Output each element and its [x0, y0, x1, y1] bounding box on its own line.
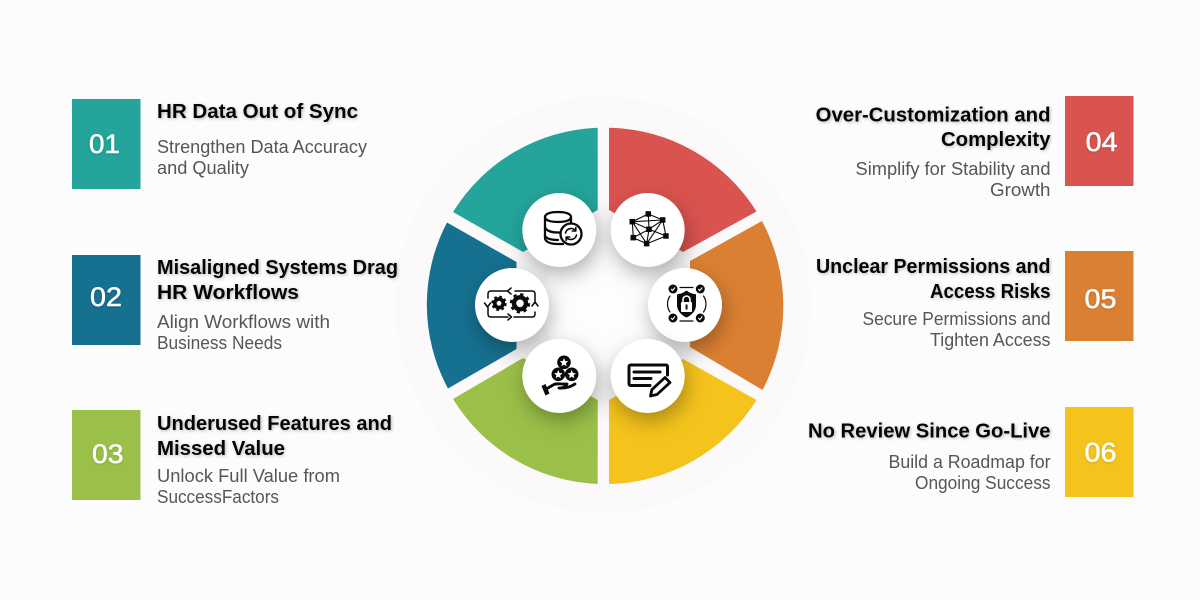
heading 03: Underused Features and: [157, 413, 392, 435]
heading 03: Missed Value: [157, 438, 285, 460]
heading 01: HR Data Out of Sync: [157, 101, 358, 123]
item 06: [808, 407, 1134, 497]
heading 02: Misaligned Systems Drag: [157, 257, 398, 279]
heading 05: Unclear Permissions and: [816, 256, 1050, 278]
heading 05: Access Risks: [930, 281, 1050, 303]
item 01: [72, 99, 367, 189]
item 02: [72, 255, 398, 353]
description 05: Tighten Access: [930, 330, 1050, 350]
number tile 03: [72, 410, 140, 500]
item 04: [816, 96, 1134, 200]
segment: red: [609, 128, 756, 252]
description 06: Build a Roadmap for: [888, 452, 1051, 472]
icon disc: security lock: [648, 268, 722, 342]
segment: teal: [453, 128, 598, 252]
description 04: Simplify for Stability and: [856, 159, 1050, 179]
icon disc: gears workflow: [475, 268, 549, 342]
description 03: [157, 466, 340, 507]
description 04: [856, 159, 1050, 200]
heading 02: HR Workflows: [157, 282, 299, 304]
icon: shield lock: [667, 284, 706, 322]
wheel diagram: [395, 97, 811, 513]
icon disc: network: [611, 193, 685, 267]
heading 04: [816, 105, 1051, 151]
description 04: Growth: [990, 180, 1050, 200]
icon: hand holding star coins: [542, 356, 578, 396]
description 05: Secure Permissions and: [862, 309, 1050, 329]
icon disc: hand with stars: [522, 339, 596, 413]
number tile 01: [72, 99, 140, 189]
number tile 05: 05: [1084, 284, 1116, 314]
number tile 06: [1065, 407, 1134, 497]
description 06: [888, 452, 1051, 493]
description 02: Align Workflows with: [157, 312, 330, 332]
centre hub: [541, 243, 665, 367]
segment: green: [453, 358, 598, 484]
heading 02: [157, 257, 398, 304]
description 06: Ongoing Success: [915, 473, 1050, 493]
description 02: Business Needs: [157, 333, 282, 353]
number tile 02: [72, 255, 140, 345]
item 05: [816, 251, 1134, 350]
description 01: and Quality: [157, 158, 249, 178]
segment: orange: [690, 221, 783, 390]
icon disc: database sync: [522, 193, 596, 267]
number tile 03: 03: [92, 439, 124, 469]
number tile 02: 02: [90, 282, 122, 312]
icon: gears workflow: [484, 288, 538, 320]
number tile 06: 06: [1084, 438, 1116, 468]
description 03: Unlock Full Value from: [157, 466, 340, 486]
icon: database sync: [545, 212, 582, 244]
heading 05: [816, 256, 1050, 303]
heading 03: [157, 413, 392, 460]
icon: form with pencil: [629, 365, 670, 396]
description 03: SuccessFactors: [157, 487, 279, 507]
wheel backdrop disc: [395, 97, 811, 513]
segment: blue: [427, 222, 516, 388]
description 01: Strengthen Data Accuracy: [157, 137, 367, 157]
number tile 04: [1065, 96, 1134, 186]
description 05: [862, 309, 1050, 350]
description 01: [157, 137, 367, 178]
description 02: [157, 312, 330, 353]
segment: yellow: [609, 359, 756, 484]
number tile 05: [1065, 251, 1134, 341]
heading 04: Complexity: [941, 129, 1051, 151]
item 03: [72, 410, 392, 507]
icon: network nodes: [630, 211, 669, 246]
heading 06: No Review Since Go-Live: [808, 421, 1050, 443]
number tile 04: 04: [1086, 127, 1118, 157]
icon disc: note and pencil: [611, 339, 685, 413]
heading 04: Over-Customization and: [816, 105, 1050, 127]
number tile 01: 01: [89, 129, 120, 159]
